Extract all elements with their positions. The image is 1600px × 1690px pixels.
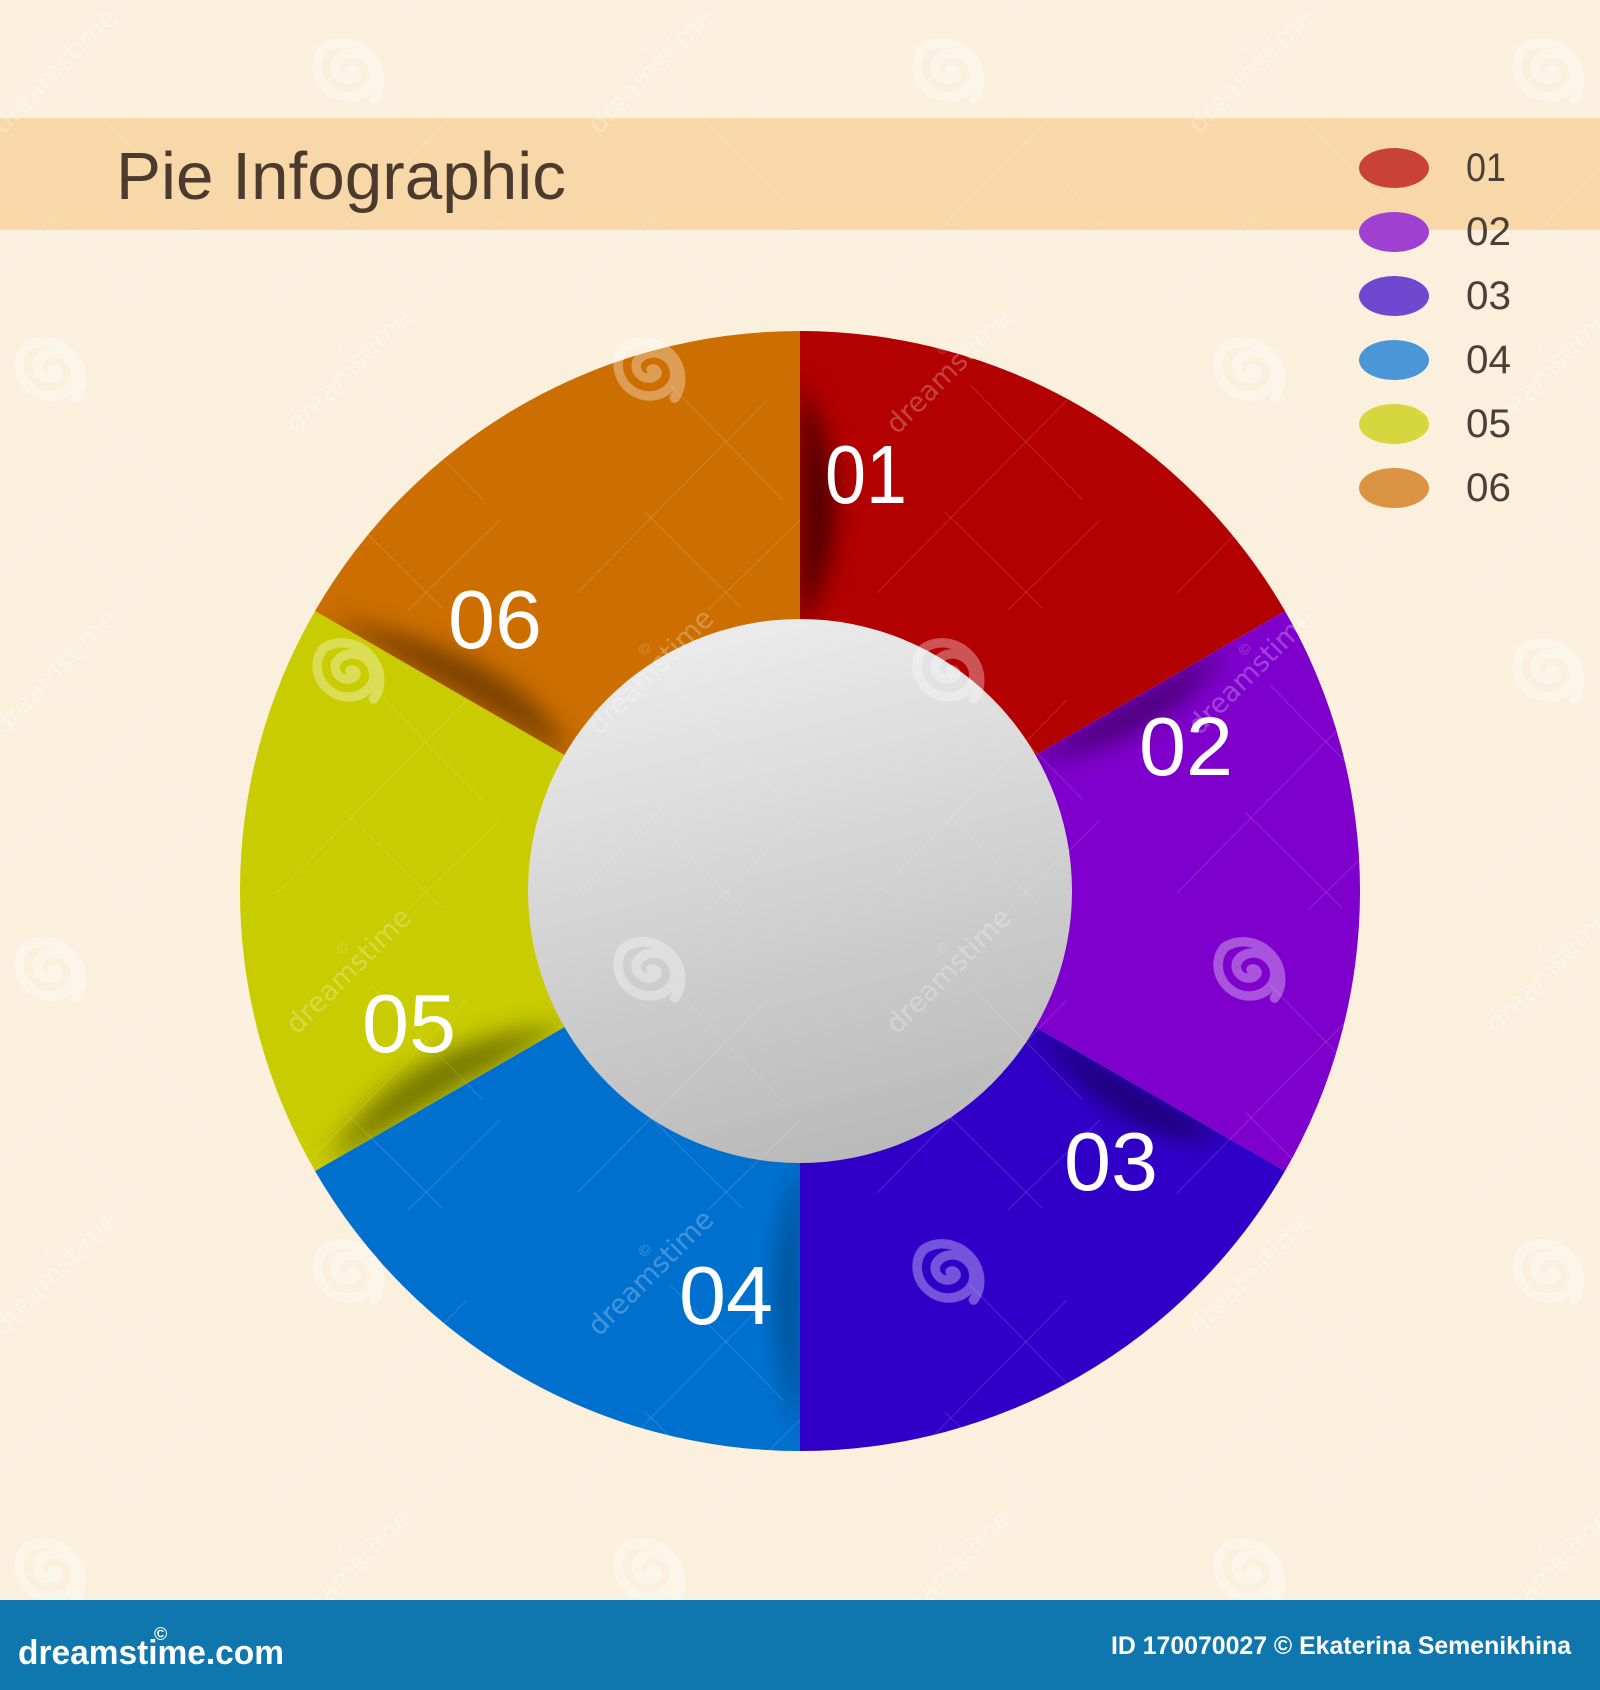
segment 02 (1036, 611, 1360, 1171)
segment label 06: 06 (448, 573, 542, 666)
legend item 01 (1359, 146, 1506, 190)
legend item 02 (1359, 210, 1511, 254)
segment 01 (800, 331, 1285, 755)
pie chart (240, 331, 1360, 1451)
segment 06 (315, 331, 800, 755)
segment label 02: 02 (1139, 700, 1233, 793)
legend item 02: 02 (1466, 210, 1511, 254)
segment 03 (800, 1027, 1285, 1451)
legend item 05: 05 (1466, 402, 1511, 446)
footer bar (0, 1600, 1600, 1690)
title band (0, 118, 1600, 230)
legend item 05 (1359, 402, 1511, 446)
footer logo: dreamstime.com (18, 1634, 284, 1672)
legend item 06: 06 (1466, 466, 1511, 510)
segment label 01: 01 (825, 428, 907, 521)
legend item 03 (1359, 274, 1511, 318)
legend (1359, 146, 1511, 510)
legend item 06 (1359, 466, 1511, 510)
segment label 03: 03 (1064, 1115, 1158, 1208)
footer logo: © (154, 1624, 167, 1644)
segment 04 (315, 1027, 800, 1451)
legend item 04: 04 (1466, 338, 1511, 382)
legend item 01: 01 (1466, 146, 1506, 190)
segment label 05: 05 (362, 977, 456, 1070)
legend item 04 (1359, 338, 1511, 382)
center circle (528, 619, 1072, 1163)
legend item 03: 03 (1466, 274, 1511, 318)
segment label 04: 04 (679, 1249, 773, 1342)
segment 05 (240, 611, 564, 1171)
footer credit: ID 170070027 © Ekaterina Semenikhina (1111, 1632, 1572, 1660)
title: Pie Infographic (116, 139, 566, 214)
